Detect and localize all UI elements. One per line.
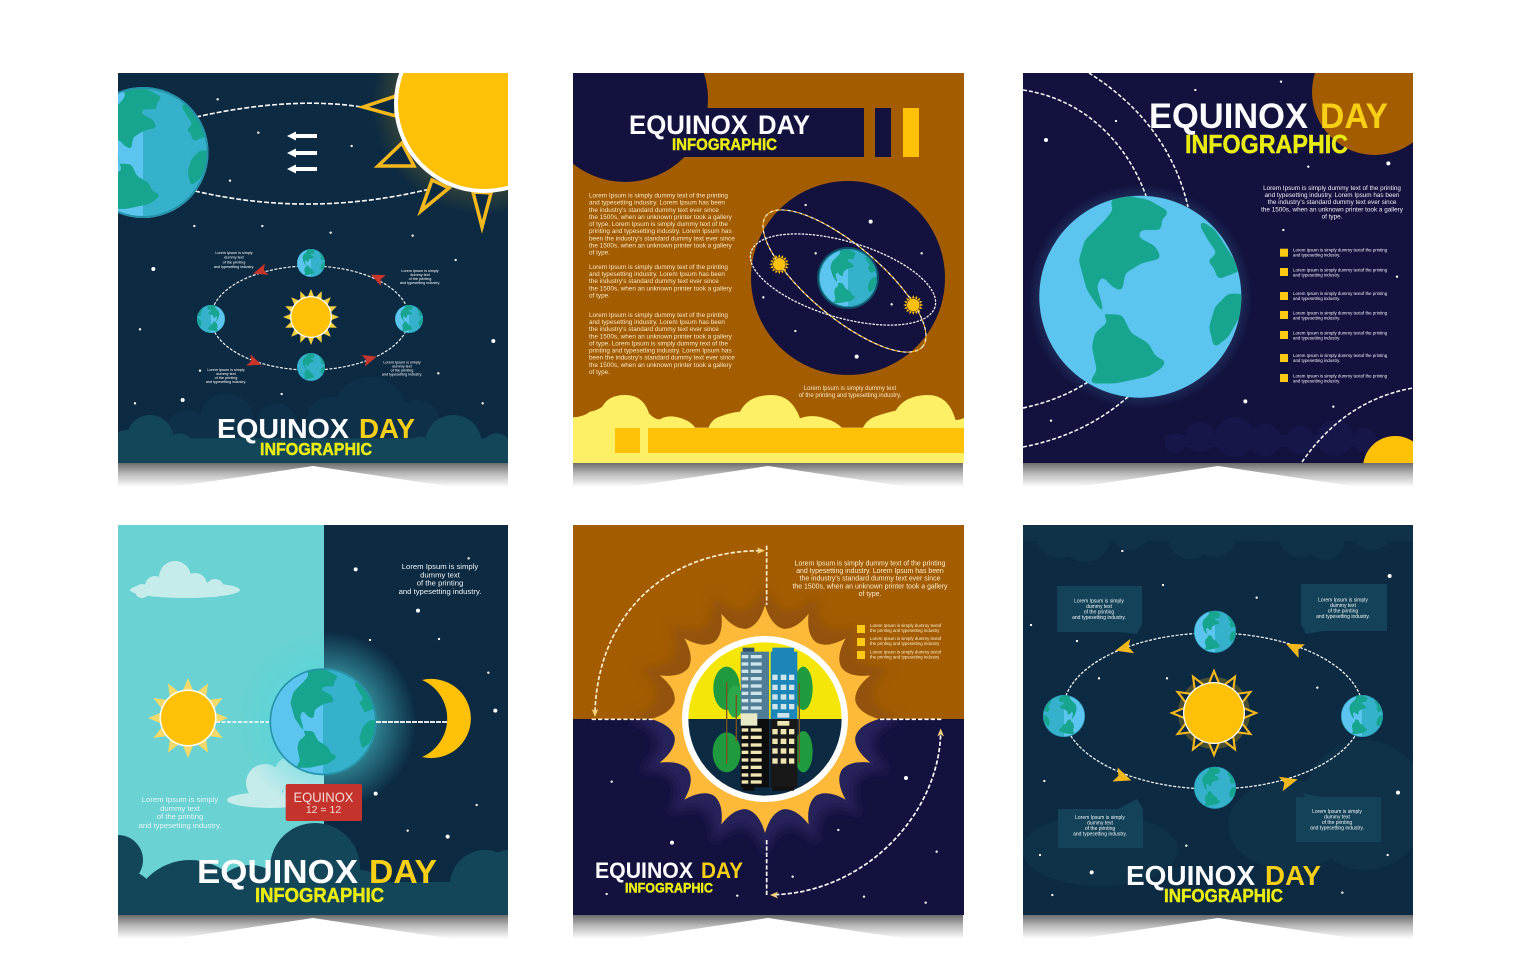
body text: and typesetting industry. Lorem Ipsum has been <box>589 271 725 278</box>
panel: day and night <box>118 525 508 938</box>
panel: orbit with callouts <box>1022 508 1427 939</box>
stars <box>1030 550 1400 896</box>
callout text: Lorem Ipsum is simply <box>1074 598 1124 604</box>
panel shadow <box>1023 463 1413 487</box>
body text: the 1500s, when an unknown printer took a gallery <box>589 333 733 340</box>
intro text: of type. <box>1322 214 1343 220</box>
orbit line from earth to sun <box>195 103 430 204</box>
orbit labels: and typesetting industry. <box>382 372 422 376</box>
callout text: Lorem Ipsum is simply <box>1318 598 1368 604</box>
bullet list: and typesetting industry. <box>1293 272 1340 278</box>
callout text: of the printing <box>1328 608 1358 614</box>
panel artwork <box>1023 73 1413 463</box>
body text: and typesetting industry. Lorem Ipsum has been <box>589 319 725 326</box>
gold direction arrows <box>1112 637 1305 791</box>
body text <box>589 193 735 376</box>
panel artwork <box>118 525 508 915</box>
bullet list <box>1280 248 1388 384</box>
footer bars <box>615 428 964 453</box>
body text: the industry's standard dummy text ever since <box>589 207 719 214</box>
day text: of the printing <box>157 812 203 821</box>
body text: been the industry's standard dummy text ever since <box>589 355 735 362</box>
callout text: dummy text <box>1324 814 1351 820</box>
body text: printing and typesetting industry. Lorem Ipsum has <box>589 348 732 355</box>
faint clouds <box>1165 417 1377 457</box>
stars <box>1044 80 1398 422</box>
title: EQUINOX <box>217 413 350 444</box>
orbit rings <box>750 209 936 353</box>
icon: earth positions <box>197 249 423 381</box>
intro text: Lorem Ipsum is simply dummy text of the printing <box>1263 185 1401 192</box>
orbit circle <box>740 181 946 375</box>
panel shadow <box>1023 915 1413 939</box>
day text: Lorem Ipsum is simply <box>142 795 218 804</box>
day text: dummy text <box>160 804 201 813</box>
title <box>595 858 743 896</box>
night text: Lorem Ipsum is simply <box>402 562 478 571</box>
callout text: and typesetting industry. <box>1310 826 1364 832</box>
body text: the industry's standard dummy text ever since <box>589 326 719 333</box>
icon: large earth <box>118 87 208 218</box>
orbit labels: and typesetting industry. <box>206 380 246 384</box>
orbit labels: Lorem Ipsum is simply <box>215 251 253 255</box>
icon: sun <box>148 678 228 758</box>
body text: the industry's standard dummy text ever since <box>589 278 719 285</box>
city illustration <box>688 642 842 796</box>
title: INFOGRAPHIC <box>1185 129 1348 159</box>
body text: been the industry's standard dummy text ever since <box>589 235 735 242</box>
stars <box>134 98 495 404</box>
night text: of the printing <box>417 578 463 588</box>
title: DAY <box>758 110 810 140</box>
equinox label <box>286 784 362 821</box>
body text: the 1500s, when an unknown printer took a gallery <box>589 362 733 369</box>
night text: dummy text <box>420 570 461 580</box>
equinox label: EQUINOX <box>294 789 354 805</box>
bullet list: Lorem Ipsum is simply dummy textof the printing <box>1293 268 1388 272</box>
body text: Lorem Ipsum is simply dummy text of the printing <box>589 312 728 319</box>
orbit diagram <box>197 249 423 381</box>
bullet list: Lorem Ipsum is simply dummy textof <box>870 650 942 654</box>
body text: printing and typesetting industry. Lorem Ipsum has <box>589 228 732 235</box>
icon: earth <box>270 668 378 775</box>
connector lines <box>216 721 269 723</box>
bullet list: Lorem Ipsum is simply dummy textof the printing <box>1293 374 1388 378</box>
arrows <box>287 132 317 174</box>
bullet list: Lorem Ipsum is simply dummy textof <box>870 623 942 628</box>
callout text: and typesetting industry. <box>1073 832 1127 838</box>
title: INFOGRAPHIC <box>260 439 372 459</box>
body text: the 1500s, when an unknown printer took a gallery <box>589 285 733 292</box>
stars <box>354 557 497 839</box>
icon: small suns <box>769 254 923 315</box>
panel shadow <box>573 915 963 939</box>
body text: of type. Lorem Ipsum is simply dummy text of the <box>589 221 728 228</box>
bullet list: Lorem Ipsum is simply dummy textof the printing <box>1293 310 1388 316</box>
intro text: the 1500s, when an unknown printer took a gallery <box>792 584 948 590</box>
callout text: and typesetting industry. <box>1072 615 1126 621</box>
title banner <box>573 73 919 182</box>
panel artwork <box>1022 508 1427 915</box>
orbit labels: dummy text <box>224 256 245 260</box>
corner circles <box>1312 73 1413 463</box>
orbit labels: of the printing <box>223 260 245 264</box>
intro text: Lorem Ipsum is simply dummy text of the printing <box>795 560 946 568</box>
orbit labels: of the printing <box>215 376 237 380</box>
title <box>630 115 810 150</box>
orbit labels <box>206 251 440 384</box>
intro text: of type. <box>859 591 881 598</box>
bullet list <box>857 623 942 660</box>
title: DAY <box>359 413 415 444</box>
panel shadow <box>118 915 508 939</box>
icon: large earth <box>1028 185 1252 409</box>
bullet list: and typesetting industry. <box>1293 316 1340 320</box>
callout boxes <box>1057 584 1387 848</box>
orbit labels: of the printing <box>409 277 431 281</box>
panel: large earth <box>1023 73 1413 486</box>
title: EQUINOX <box>595 858 693 883</box>
callout text: of the printing <box>1085 826 1115 832</box>
body text: Lorem Ipsum is simply dummy text of the printing <box>589 193 728 200</box>
callout text: dummy text <box>1086 604 1113 610</box>
orbit labels: dummy text <box>410 273 431 277</box>
bullet list: and typesetting industry. <box>1293 252 1340 258</box>
panel shadow <box>118 463 508 487</box>
title <box>218 418 414 456</box>
caption: of the printing and typesetting industry. <box>799 393 902 399</box>
title: DAY <box>701 858 743 883</box>
bullet list: the printing and typesetting industry <box>870 654 940 660</box>
orbit labels: and typesetting industry. <box>214 265 254 269</box>
bullet list: and typesetting industry. <box>1293 358 1340 363</box>
panel artwork <box>118 73 508 463</box>
callout text: dummy text <box>1330 603 1357 609</box>
body text: of type. <box>589 292 610 300</box>
icon: crescent moon <box>422 679 471 758</box>
buildings <box>741 648 797 791</box>
panel: orbit overview <box>118 73 508 486</box>
bullet list: and typesetting industry. <box>1293 336 1340 340</box>
icon: sun <box>1172 671 1256 755</box>
orbit labels: dummy text <box>216 372 237 376</box>
callout text: and typesetting industry. <box>1316 614 1370 620</box>
title: EQUINOX <box>1126 860 1256 891</box>
title: INFOGRAPHIC <box>1164 885 1283 906</box>
orbit lines <box>1023 73 1413 462</box>
faint clouds <box>1022 508 1427 886</box>
title: INFOGRAPHIC <box>255 885 384 907</box>
callout text: dummy text <box>1087 821 1114 827</box>
night text: and typesetting industry. <box>399 587 481 596</box>
intro text: the industry's standard dummy text ever since <box>1268 199 1397 206</box>
orbit labels: Lorem Ipsum is simply <box>207 368 245 372</box>
bullet list: Lorem Ipsum is simply dummy textof the printing <box>1293 353 1388 358</box>
title: INFOGRAPHIC <box>672 135 777 154</box>
title: INFOGRAPHIC <box>625 880 713 896</box>
red direction arrows <box>246 263 386 370</box>
caption: Lorem Ipsum is simply dummy text <box>804 386 897 392</box>
bullet list: Lorem Ipsum is simply dummy textof the printing <box>1293 248 1388 252</box>
panel: sun and city <box>573 525 964 939</box>
title <box>1151 103 1388 154</box>
intro text: the 1500s, when an unknown printer took a gallery <box>1261 206 1404 214</box>
title: DAY <box>369 854 437 891</box>
dark clouds <box>93 823 542 980</box>
orbit labels: of the printing <box>391 368 413 372</box>
intro text: and typesetting industry. Lorem Ipsum has been <box>1265 192 1400 199</box>
stars <box>605 776 938 904</box>
bullet list: the printing and typesetting industry <box>870 628 940 633</box>
orbit labels: Lorem Ipsum is simply <box>401 269 439 273</box>
bullet list: the printing and typesetting industry <box>870 641 940 646</box>
intro text: and typesetting industry. Lorem Ipsum has been <box>796 568 944 575</box>
title: DAY <box>1265 860 1321 891</box>
body text: of type. Lorem Ipsum is simply dummy text of the <box>589 340 728 348</box>
panel artwork <box>573 525 964 915</box>
title: EQUINOX <box>197 854 359 891</box>
icon: large sun <box>357 73 508 234</box>
equinox label: 12 = 12 <box>306 804 341 816</box>
panel shadow <box>573 463 963 487</box>
body text: Lorem Ipsum is simply dummy text of the printing <box>589 264 728 271</box>
title <box>197 854 437 907</box>
cycle arrows <box>592 546 944 898</box>
body text: and typesetting industry. Lorem Ipsum has been <box>589 200 725 207</box>
orbit labels: and typesetting industry. <box>400 281 440 285</box>
body text: the 1500s, when an unknown printer took a gallery <box>589 214 733 221</box>
orbit labels: dummy text <box>392 364 413 368</box>
bullet list: and typesetting industry. <box>1293 378 1340 384</box>
trees <box>713 667 813 772</box>
icon: sun <box>283 289 339 345</box>
callout text: Lorem Ipsum is simply <box>1312 809 1362 815</box>
bullet list: Lorem Ipsum is simply dummy textof the printing <box>1293 291 1388 296</box>
bullet list: and typesetting industry. <box>1293 296 1340 301</box>
icon: earth positions <box>1043 611 1383 809</box>
stars <box>762 204 923 359</box>
orbit labels: Lorem Ipsum is simply <box>383 360 421 364</box>
icon: earth <box>817 247 879 309</box>
callout text <box>1072 598 1370 838</box>
title: EQUINOX <box>1149 96 1308 136</box>
title: EQUINOX <box>629 110 748 140</box>
panel: text and orbit circle <box>573 73 964 486</box>
connector to moon <box>376 721 447 723</box>
title <box>1126 860 1321 906</box>
callout text: of the printing <box>1084 610 1114 616</box>
sun glow <box>628 582 902 856</box>
clouds <box>572 395 965 464</box>
body text: of type. <box>589 369 610 376</box>
clouds <box>118 415 508 463</box>
intro text: the industry's standard dummy text ever since <box>800 576 941 582</box>
glow <box>237 631 417 811</box>
bullet list: Lorem Ipsum is simply dummy textof <box>870 636 942 641</box>
panel artwork <box>573 73 964 463</box>
body text: of type. <box>589 250 610 256</box>
bullet list: Lorem Ipsum is simply dummy textof the printing <box>1293 330 1388 336</box>
orbit diagram <box>1043 611 1383 809</box>
day text: and typesetting industry. <box>139 821 221 830</box>
callout text: of the printing <box>1322 820 1352 826</box>
body text: the 1500s, when an unknown printer took a gallery <box>589 242 733 249</box>
icon: sun <box>651 605 879 833</box>
callout text: Lorem Ipsum is simply <box>1075 815 1125 821</box>
clouds <box>130 561 324 808</box>
title: DAY <box>1320 96 1388 136</box>
